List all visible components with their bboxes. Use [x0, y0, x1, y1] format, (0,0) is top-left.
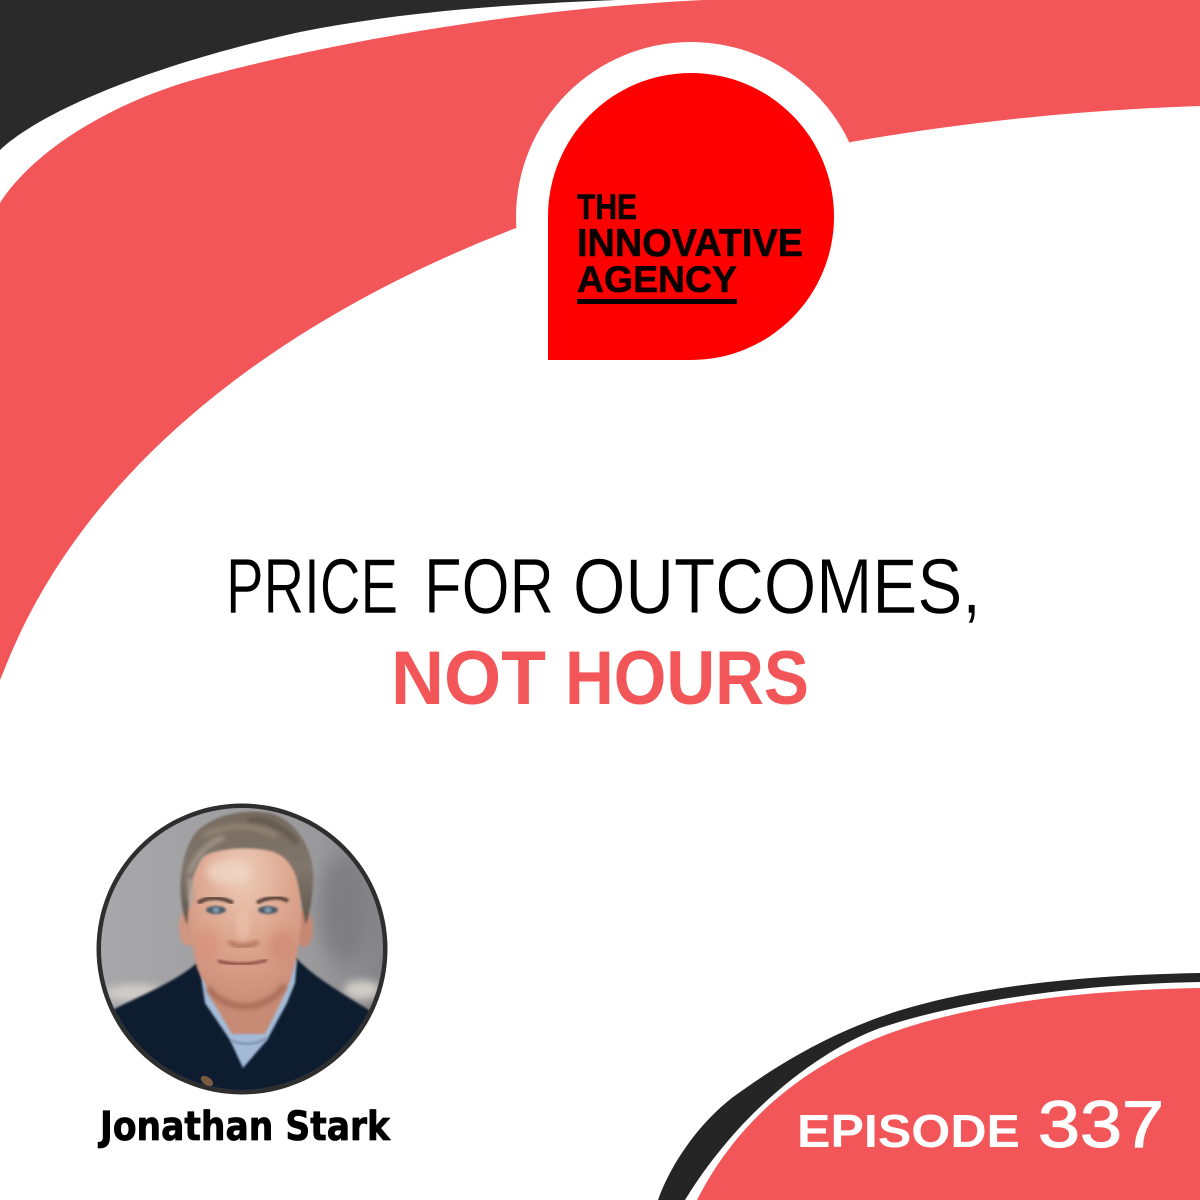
- headline line 1: OUTCOMES,: [573, 542, 981, 630]
- logo: The Innovative Agency: [548, 73, 834, 360]
- nose: [229, 941, 258, 946]
- logo teardrop shape: [548, 73, 834, 360]
- mouth: [218, 960, 267, 964]
- headline line 2: [391, 636, 809, 721]
- speaker name: Jonathan Stark: [97, 1104, 391, 1150]
- neck: [205, 976, 292, 1036]
- coral banner swoosh, top: [0, 0, 1200, 680]
- headline line 2: HOURS: [565, 636, 809, 721]
- white ring around logo: [516, 42, 866, 392]
- chin shadow on neck: [208, 985, 285, 1006]
- portrait: Jonathan Stark: [95, 800, 390, 1100]
- dark accent swoosh, bottom right: [658, 973, 1200, 1200]
- episode number: 337: [1038, 1087, 1164, 1161]
- headline line 1: PRICE: [226, 542, 398, 630]
- ears: [178, 908, 194, 947]
- logo wordmark: [577, 187, 803, 300]
- sweater button: [200, 1076, 214, 1086]
- logo underline: [577, 299, 737, 304]
- logo wordmark: INNOVATIVE: [577, 222, 803, 265]
- eyebrows: [198, 898, 233, 903]
- headline line 2: NOT: [391, 636, 546, 721]
- shirt collar fold: [231, 1038, 267, 1044]
- logo wordmark: THE: [577, 187, 637, 227]
- dark corner swoosh, top left: [0, 0, 617, 150]
- episode label: [797, 1087, 1164, 1161]
- shirt: [200, 960, 297, 1068]
- eyes: [206, 906, 226, 914]
- logo wordmark: AGENCY: [577, 259, 737, 300]
- cheek flush: [200, 932, 218, 953]
- face: [190, 842, 301, 1004]
- hair: [181, 812, 313, 925]
- coral corner panel, bottom right: [697, 988, 1200, 1200]
- portrait frame: [96, 804, 388, 1094]
- headline line 1: FOR: [424, 542, 554, 630]
- headline line 1: [226, 542, 981, 630]
- episode word: EPISODE: [797, 1105, 1020, 1157]
- portrait photo: [101, 808, 383, 1090]
- forehead highlight: [206, 860, 250, 884]
- sweater: [114, 958, 370, 1090]
- headline: [226, 542, 981, 721]
- hair highlights: [190, 820, 296, 900]
